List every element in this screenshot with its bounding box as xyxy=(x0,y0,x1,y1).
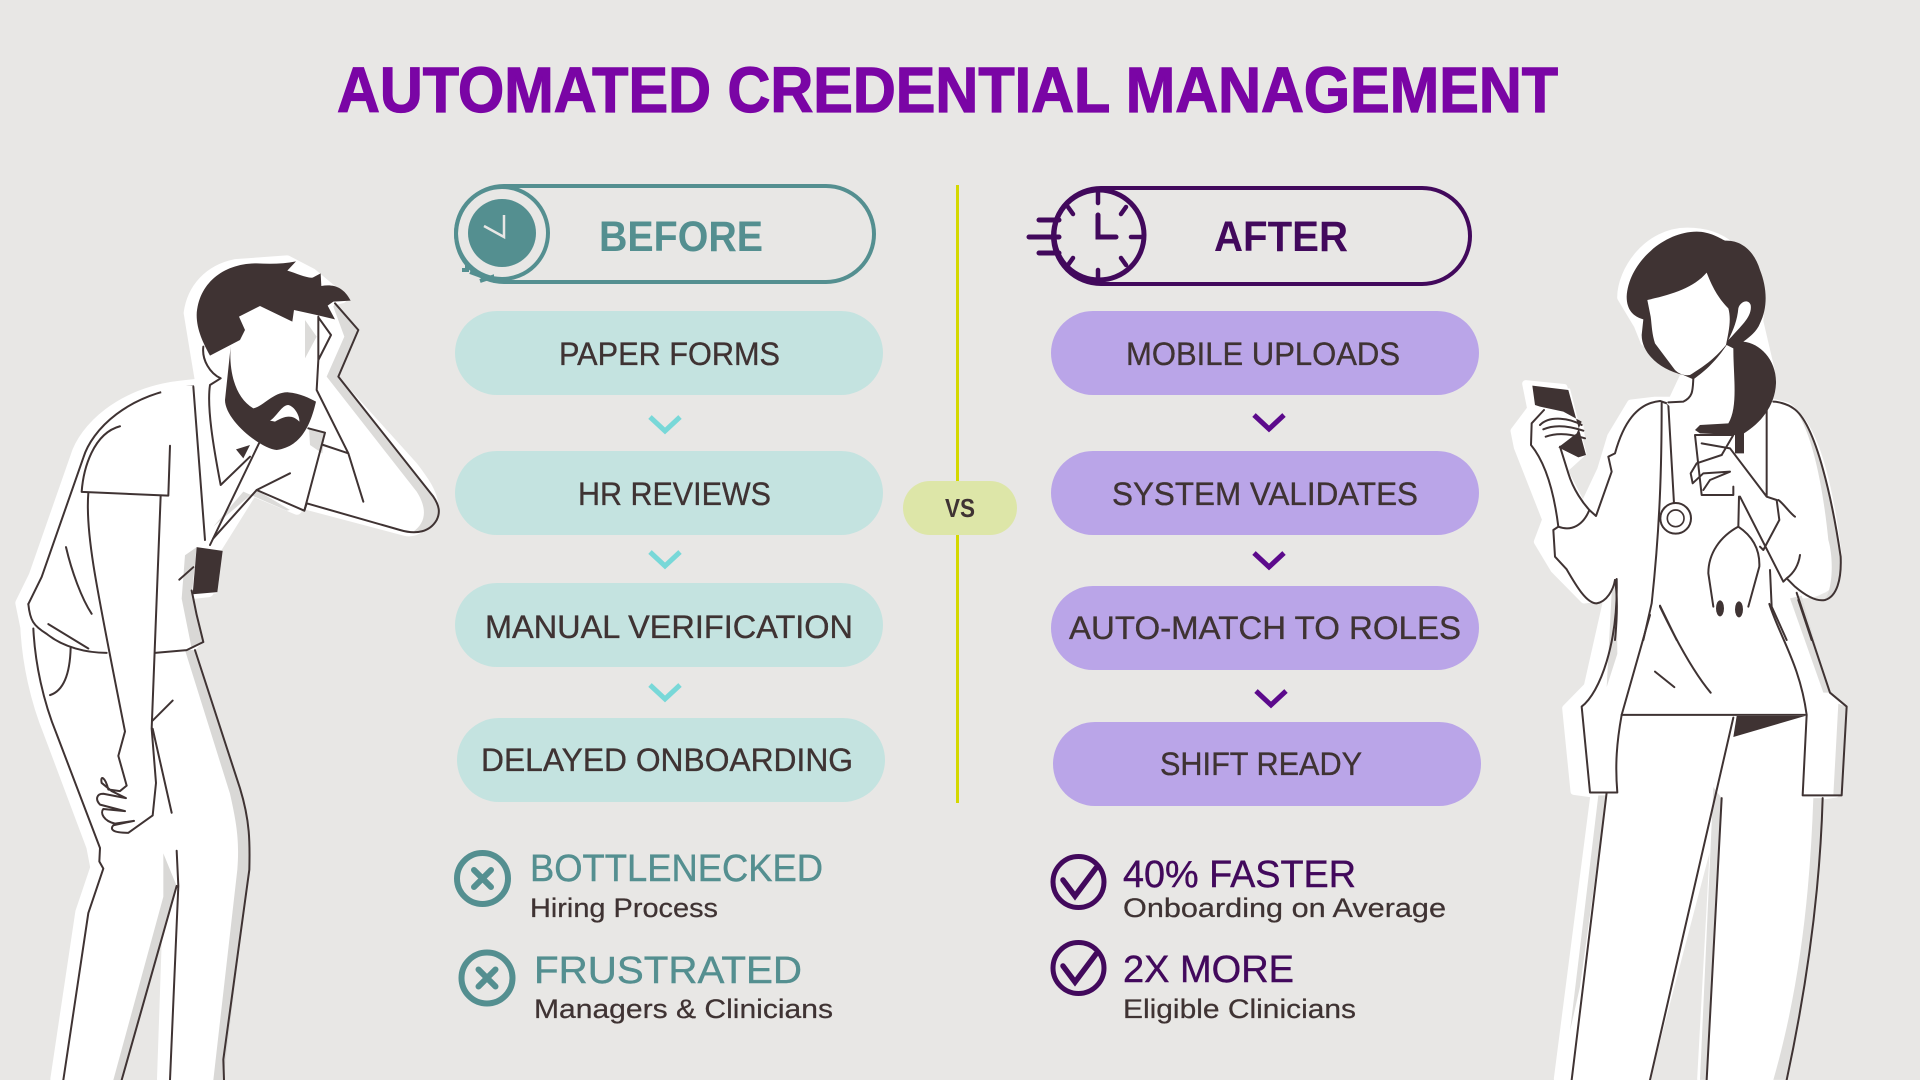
outcome: frustrated: Managers & Clinicians xyxy=(534,994,833,1024)
arrow xyxy=(1256,691,1286,705)
step: auto-match to roles: AUTO-MATCH TO ROLES xyxy=(1069,610,1461,646)
step: shift ready: SHIFT READY xyxy=(1160,746,1362,782)
outcome: bottlenecked: BOTTLENECKED xyxy=(530,848,823,890)
before header pill xyxy=(456,186,874,282)
step: system validates xyxy=(1051,451,1479,535)
center divider line xyxy=(956,185,959,803)
icon: clock before xyxy=(456,187,548,281)
step: paper forms: PAPER FORMS xyxy=(559,336,780,372)
hair xyxy=(1627,232,1776,453)
icon: check circle xyxy=(1053,856,1104,908)
step: delayed onboarding: DELAYED ONBOARDING xyxy=(481,742,853,778)
outcome: 2x more: Eligible Clinicians xyxy=(1123,994,1356,1024)
outcome: bottlenecked: Hiring Process xyxy=(530,893,718,923)
after header pill: AFTER xyxy=(1214,213,1348,261)
outcome: 40% faster: 40% FASTER xyxy=(1123,854,1356,896)
illustration: nurse with phone xyxy=(1514,231,1847,1080)
vs badge: VS xyxy=(945,493,975,523)
arrow xyxy=(1254,415,1284,429)
step: hr reviews: HR REVIEWS xyxy=(578,476,771,512)
beard xyxy=(225,343,316,450)
illustration: frustrated man xyxy=(20,260,439,1080)
step: auto-match to roles xyxy=(1051,586,1479,670)
outcome: 40% faster xyxy=(1053,854,1446,923)
icon: x circle xyxy=(457,853,508,904)
after header pill xyxy=(1029,188,1470,284)
arrow xyxy=(650,552,680,566)
step: manual verification xyxy=(455,583,883,667)
phone xyxy=(1532,386,1586,457)
arrow xyxy=(650,417,680,431)
vs badge xyxy=(903,481,1017,535)
outcome: 40% faster: Onboarding on Average xyxy=(1123,893,1446,923)
arrow xyxy=(1254,553,1284,567)
outcome: 2x more xyxy=(1053,942,1356,1024)
step: shift ready xyxy=(1053,722,1481,806)
step: delayed onboarding xyxy=(457,718,885,802)
panel: before column xyxy=(455,186,885,802)
outcome: bottlenecked xyxy=(457,848,823,923)
hair xyxy=(197,261,351,356)
outcome: frustrated: FRUSTRATED xyxy=(534,950,802,992)
step: manual verification: MANUAL VERIFICATION xyxy=(485,609,853,645)
panel: after column xyxy=(1029,188,1481,806)
step: mobile uploads: MOBILE UPLOADS xyxy=(1126,336,1400,372)
outcome: frustrated xyxy=(462,950,833,1024)
icon: x circle xyxy=(462,952,512,1004)
step: hr reviews xyxy=(455,451,883,535)
icon: fast clock xyxy=(1029,190,1144,280)
arrow xyxy=(650,685,680,699)
step: paper forms xyxy=(455,311,883,395)
icon: check circle xyxy=(1053,942,1104,994)
step: mobile uploads xyxy=(1051,311,1479,395)
step: system validates: SYSTEM VALIDATES xyxy=(1112,476,1418,512)
outcome: 2x more: 2X MORE xyxy=(1123,949,1294,991)
title: AUTOMATED CREDENTIAL MANAGEMENT xyxy=(337,54,1558,126)
before header pill: BEFORE xyxy=(599,213,763,261)
